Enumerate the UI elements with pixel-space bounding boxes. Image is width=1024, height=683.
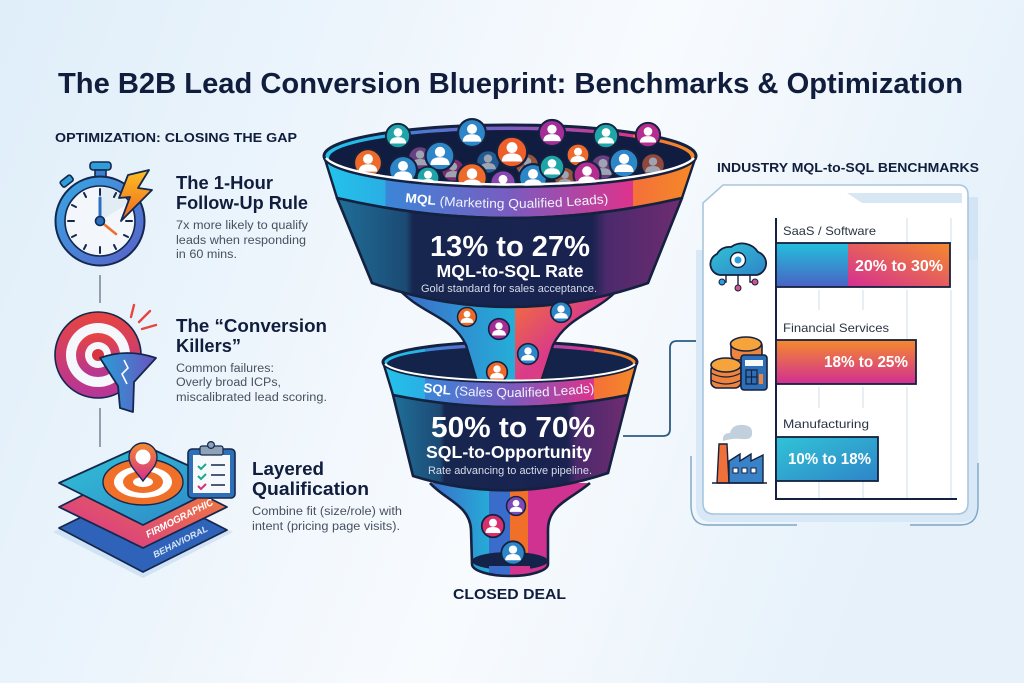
funnel neck: MQL xyxy=(401,293,615,380)
text: conversion killers: Killers” xyxy=(176,336,241,356)
label: closed deal: CLOSED DEAL xyxy=(453,586,566,603)
text: conversion killers: miscalibrated lead scoring. xyxy=(176,392,327,404)
text: conversion killers: The “Conversion xyxy=(176,316,327,336)
leads in neck: MQL xyxy=(458,302,571,364)
text: 1-hour rule: in 60 mins. xyxy=(176,249,237,261)
icon: cloud xyxy=(710,243,766,291)
funnel band: MQL xyxy=(324,156,696,218)
stat: MQL rate: MQL-to-SQL Rate xyxy=(436,261,584,281)
connector: funnel to benchmarks xyxy=(623,341,697,436)
panel: industry benchmarks xyxy=(691,160,979,525)
label: MQL: MQL (Marketing Qualified Leads) xyxy=(406,193,608,211)
bar: Manufacturing xyxy=(776,417,878,481)
icon: layered qualification: FIRMOGRAPHIC xyxy=(144,497,216,541)
bar: Financial Services: Financial Services xyxy=(783,321,889,335)
bar: SaaS / Software xyxy=(776,224,950,287)
bar: SaaS / Software: 20% to 30% xyxy=(855,258,943,275)
text: 1-hour rule: leads when responding xyxy=(176,235,306,247)
heading: optimization: OPTIMIZATION: CLOSING THE GAP xyxy=(55,130,297,145)
bar: Manufacturing: 10% to 18% xyxy=(788,451,871,468)
text: layered qualification: Layered xyxy=(252,459,324,479)
text: 1-hour rule xyxy=(176,173,308,261)
icon: target with broken funnel xyxy=(55,305,156,412)
stat: MQL rate: 13% to 27% xyxy=(430,231,590,263)
funnel: SQL upper (rim back) xyxy=(383,342,637,382)
stat: SQL rate: 50% to 70% xyxy=(431,412,595,444)
text: conversion killers: Overly broad ICPs, xyxy=(176,377,281,389)
bar: Financial Services xyxy=(776,321,916,384)
text: 1-hour rule: Follow-Up Rule xyxy=(176,193,308,213)
title: The B2B Lead Conversion Blueprint: Benchmarks & Optimization xyxy=(58,68,963,100)
funnel body: SQL xyxy=(393,395,628,490)
bar: SaaS / Software: SaaS / Software xyxy=(783,224,876,238)
text: 1-hour rule: 7x more likely to qualify xyxy=(176,220,308,232)
funnel: SQL xyxy=(382,360,638,578)
text: conversion killers: Common failures: xyxy=(176,363,274,375)
panel: optimization xyxy=(53,130,402,578)
icon: stopwatch xyxy=(56,162,152,266)
text: layered qualification xyxy=(252,459,402,533)
funnel body: MQL xyxy=(337,198,682,307)
icon: layered qualification: BEHAVIORAL xyxy=(151,524,209,560)
leads in neck: SQL xyxy=(482,497,525,565)
icon: coins and calculator xyxy=(711,337,767,390)
bar: Manufacturing: Manufacturing xyxy=(783,417,869,431)
text: conversion killers xyxy=(176,316,327,404)
funnel neck: SQL xyxy=(429,482,591,578)
funnel band: SQL xyxy=(383,362,637,407)
icon: layered qualification xyxy=(53,442,235,578)
bar: Financial Services: 18% to 25% xyxy=(824,354,908,371)
heading: benchmarks: INDUSTRY MQL-to-SQL BENCHMARKS xyxy=(717,160,979,175)
leads in funnel mouth xyxy=(355,118,664,186)
label: SQL: SQL (Sales Qualified Leads) xyxy=(424,383,594,400)
funnel: MQL xyxy=(322,118,736,410)
icon: factory xyxy=(712,425,767,483)
lead dropping into SQL xyxy=(487,362,507,382)
stat: SQL rate xyxy=(426,412,595,477)
text: layered qualification: Combine fit (size/role) with xyxy=(252,506,402,518)
text: layered qualification: Qualification xyxy=(252,479,369,499)
stat: SQL rate: SQL-to-Opportunity xyxy=(426,442,592,462)
stat: MQL rate xyxy=(421,231,597,295)
stat: MQL rate: Gold standard for sales acceptance. xyxy=(421,283,597,295)
stat: SQL rate: Rate advancing to active pipeline. xyxy=(428,465,592,477)
text: 1-hour rule: The 1-Hour xyxy=(176,173,273,193)
text: layered qualification: intent (pricing page visits). xyxy=(252,521,400,533)
